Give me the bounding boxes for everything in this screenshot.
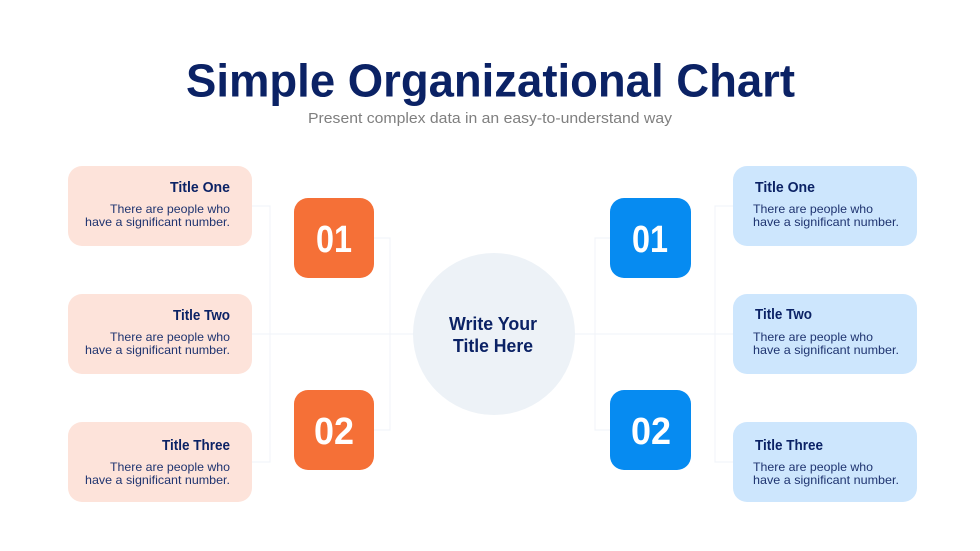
panel: left column title three: There are people who [110, 460, 230, 474]
number badge: blue 02: 02 [631, 411, 671, 453]
panel: right column title one: have a significant number. [753, 215, 899, 229]
panel: right column title three [733, 422, 917, 502]
number badge: blue 02 [610, 390, 691, 470]
central circle: Title Here [453, 336, 533, 356]
panel: right column title three: There are people who [753, 460, 873, 474]
panel: right column title one: Title One [755, 180, 815, 196]
panel: left column title two: Title Two [173, 308, 230, 324]
number badge: orange 01 [294, 198, 374, 278]
panel: right column title two: Title Two [755, 307, 812, 323]
panel: left column title three: Title Three [162, 438, 230, 454]
number badge: orange 01: 01 [316, 219, 352, 261]
panel: right column title two: have a significant number. [753, 343, 899, 357]
panel: right column title two: There are people who [753, 330, 873, 344]
number badge: orange 02 [294, 390, 374, 470]
number badge: orange 02: 02 [314, 411, 354, 453]
central circle: Write Your [449, 314, 537, 334]
panel: left column title three [68, 422, 252, 502]
title: Simple Organizational Chart [186, 54, 795, 106]
panel: left column title one: Title One [170, 180, 230, 196]
panel: right column title one: There are people who [753, 202, 873, 216]
panel: left column title two: There are people who [110, 330, 230, 344]
number badge: blue 01: 01 [632, 219, 668, 261]
number badge: blue 01 [610, 198, 691, 278]
central circle [413, 253, 575, 415]
panel: right column title one [733, 166, 917, 246]
panel: left column title one: have a significant number. [85, 215, 230, 229]
panel: right column title three: Title Three [755, 438, 823, 454]
subtitle: Present complex data in an easy-to-understand way [308, 111, 673, 127]
panel: left column title one [68, 166, 252, 246]
panel: left column title two [68, 294, 252, 374]
panel: left column title one: There are people who [110, 202, 230, 216]
panel: right column title two [733, 294, 917, 374]
panel: right column title three: have a significant number. [753, 473, 899, 487]
panel: left column title two: have a significant number. [85, 343, 230, 357]
panel: left column title three: have a significant number. [85, 473, 230, 487]
